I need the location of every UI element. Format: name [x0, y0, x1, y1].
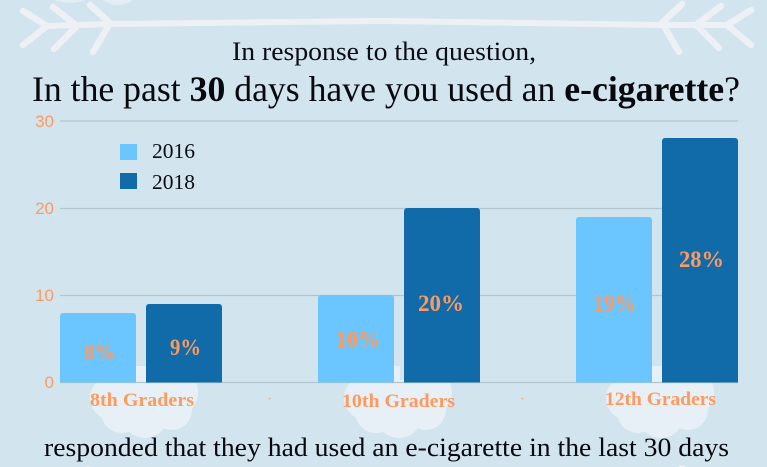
y axis labels: 20: [35, 199, 54, 218]
cloud: 10th graders: [344, 366, 452, 438]
arrow decoration: [23, 4, 751, 52]
bars: 10th graders: 10%: [336, 327, 380, 352]
bars: 12th graders: 19%: [593, 291, 636, 316]
gridlines: [60, 121, 738, 382]
category labels: 12th Graders: [605, 390, 716, 410]
subtitle: In response to the question,: [232, 37, 536, 66]
separator dots: [269, 398, 523, 399]
bars: 10th graders: 20%: [418, 291, 464, 316]
clouds behind chart labels: [84, 366, 714, 467]
bars: 12th graders: [576, 138, 738, 382]
legend swatch 2016: [120, 144, 137, 160]
bars: 12th graders: 28%: [679, 247, 724, 272]
bars: 10th graders: [318, 208, 480, 382]
bars: 8th graders: 9%: [170, 335, 201, 360]
cloud: 12th graders: [606, 366, 714, 438]
legend label 2018: 2018: [152, 170, 195, 194]
footer text: responded that they had used an e-cigarette in the last 30 days: [44, 433, 729, 462]
y axis labels: 0: [45, 373, 54, 392]
bars: 8th graders: [60, 304, 222, 382]
category labels: [90, 390, 716, 412]
category labels: 8th Graders: [90, 391, 194, 411]
y axis labels: [35, 112, 54, 392]
legend: [120, 139, 195, 194]
title: In the past 30 days have you used an e-cigarette?: [32, 69, 740, 109]
bottom cloud fragments: [84, 465, 687, 467]
legend label 2016: 2016: [152, 139, 195, 163]
legend swatch 2018: [120, 173, 137, 189]
top cloud fragments: [48, 0, 138, 5]
y axis labels: 10: [35, 286, 54, 305]
bar chart: [60, 138, 738, 382]
cloud: 8th graders: [90, 366, 198, 438]
y axis labels: 30: [35, 112, 54, 131]
bars: 8th graders: 8%: [84, 340, 115, 365]
category labels: 10th Graders: [342, 392, 455, 412]
